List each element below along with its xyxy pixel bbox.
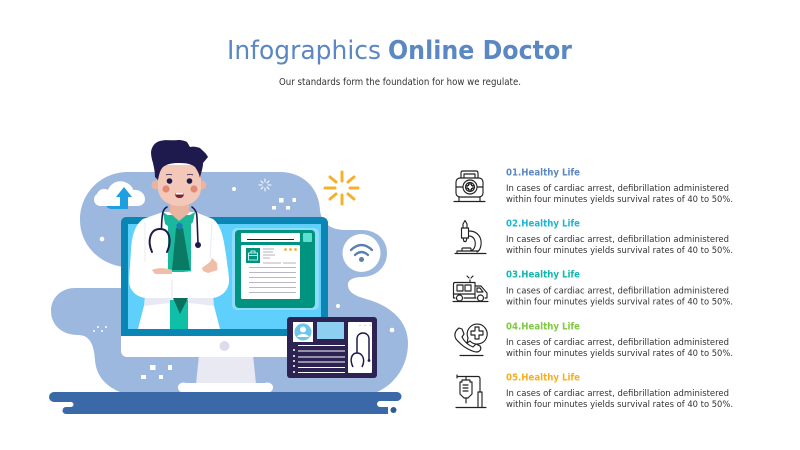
item 5 text: In cases of cardiac arrest, defibrillation administered [506,389,729,399]
base platform [49,392,402,414]
coat fold strip [144,294,214,306]
cloud upload icon [94,181,145,209]
item 1 text: 01.Healthy Life [506,168,580,178]
item 4 text: In cases of cardiac arrest, defibrillation administered [506,338,729,348]
sleeves [129,266,229,298]
hair [151,140,208,180]
background blob [51,172,408,392]
stethoscope chest piece [195,242,201,248]
subtitle: Our standards form the foundation for how we regulate. [279,77,521,88]
item 3 text: In cases of cardiac arrest, defibrillation administered [506,286,729,296]
item 5 text: within four minutes yields survival rates of 40 to 50%. [506,400,733,410]
wifi icon [342,234,380,272]
base dot [390,407,396,413]
stethoscope [150,207,198,252]
item 4 text [506,322,733,359]
item 2 text: In cases of cardiac arrest, defibrillation administered [506,235,729,245]
screen frame [121,217,328,336]
monitor chin [121,330,328,357]
monitor foot [178,382,273,392]
item 2 icon: microscope [455,220,486,254]
neck [170,198,189,221]
title: Infographics [227,36,381,66]
hand right [202,258,218,273]
collar [163,212,195,229]
item 2 text: 02.Healthy Life [506,218,580,230]
mouth [175,193,184,198]
item 5 icon: IV drip [456,375,486,408]
sun burst icon [325,172,358,204]
shirt [168,215,191,272]
item 1 text: In cases of cardiac arrest, defibrillation administered [506,184,729,194]
decorative dots [93,187,394,379]
cheeks [162,185,170,193]
item 4 text: within four minutes yields survival rates of 40 to 50%. [506,349,733,359]
tablet [287,317,377,378]
item 2 text: within four minutes yields survival rates of 40 to 50%. [506,246,733,256]
tie [172,228,190,270]
item 5 text [506,372,733,410]
item 4 icon: phone and medical cross [455,324,487,356]
doctor [129,140,229,329]
monitor [121,217,328,392]
item 3 text: within four minutes yields survival rates of 40 to 50%. [506,298,733,308]
item 3 text: 03.Healthy Life [506,270,580,280]
ears [152,180,160,190]
coat lapel folds [145,222,212,262]
monitor stand [196,355,256,384]
shirt lower [170,300,188,329]
lab coat [129,212,229,329]
face [158,165,201,206]
item 3 text [506,270,733,308]
item 1 icon: medical kit [454,171,485,202]
hand left [152,268,172,274]
home button [220,341,230,351]
title: Online Doctor [388,36,572,66]
item 4 text: 04.Healthy Life [506,322,580,332]
sparkle [259,179,271,191]
title [227,36,572,66]
document panel [232,228,319,310]
item 1 text [506,168,733,205]
sleeve fold [171,280,173,298]
item 2 text [506,218,733,256]
item 3 icon: ambulance [453,276,488,302]
item 1 text: within four minutes yields survival rates of 40 to 50%. [506,195,733,205]
item 5 text: 05.Healthy Life [506,372,580,384]
screen [128,224,321,329]
eyes [167,178,172,184]
